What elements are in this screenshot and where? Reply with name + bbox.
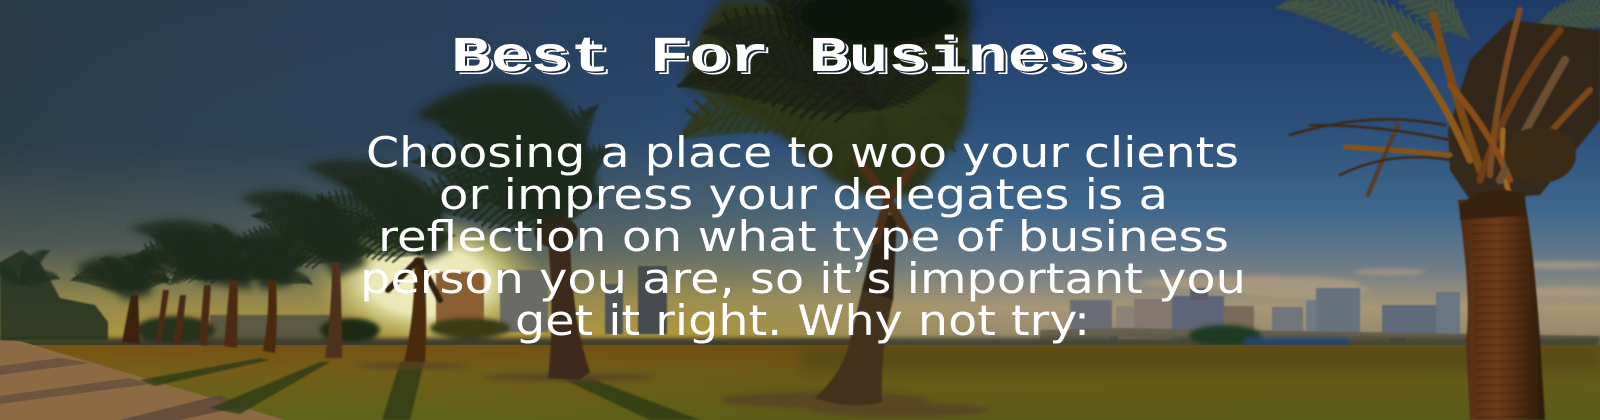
overpass bridge [1040,328,1600,348]
far left trees [0,241,108,340]
big centre palm [677,0,971,405]
big right palm [1276,0,1600,420]
body copy: or impress your delegates is a [439,170,1168,219]
body copy: get it right. Why not try: [515,296,1090,345]
setting sun [310,216,546,348]
palm E [135,212,270,348]
tree base mounds [358,363,990,417]
palm D [230,224,313,353]
body copy: person you are, so it’s important you [360,254,1246,303]
tree shadows on grass [140,358,700,420]
palm H [70,248,173,344]
distant trees and shoreline [0,316,1600,350]
grass lawn [0,345,1600,420]
feathery top fronds [1276,0,1600,84]
title: Best For Business [451,30,1127,87]
sidewalk [0,340,285,420]
body copy: reflection on what type of business [378,212,1229,261]
skyline left [210,266,667,345]
body copy: Choosing a place to woo your clients [366,128,1239,177]
palm G [121,241,206,344]
skyline right [1070,288,1460,343]
palm A [404,83,613,380]
crown [1448,20,1600,200]
palm F [132,217,245,346]
palm C [230,179,376,358]
small palms row [70,156,456,362]
clouds on right horizon [1140,261,1600,298]
crowns underlay [74,159,450,300]
trunk [1458,195,1545,420]
palm B [298,156,456,362]
